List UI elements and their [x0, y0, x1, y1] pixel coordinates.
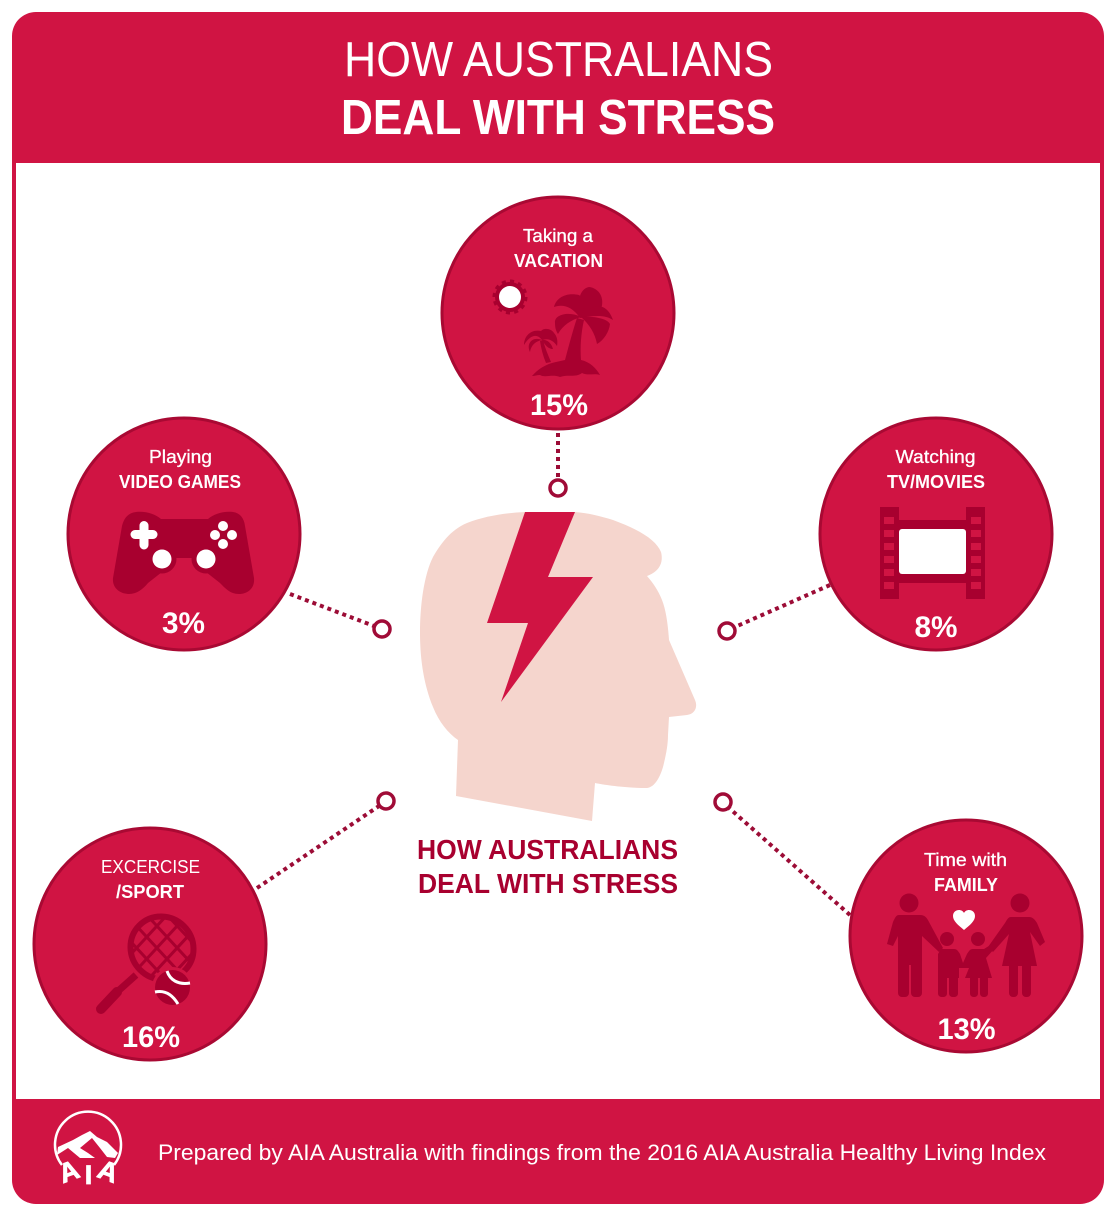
- title: DEAL WITH STRESS: [341, 91, 775, 145]
- footer logo: AIA: A: [94, 1154, 122, 1189]
- connector: video games: [290, 594, 390, 637]
- connector: family: [715, 794, 850, 915]
- panel: exercise: 16%: [122, 1021, 180, 1054]
- connector: tv and movies: [719, 585, 830, 639]
- panel: tv and movies: Watching: [896, 447, 976, 467]
- panel: exercise: /SPORT: [116, 882, 184, 902]
- centre caption: DEAL WITH STRESS: [418, 868, 678, 899]
- icon: sun: [494, 282, 526, 312]
- title: [341, 33, 775, 145]
- panel: video games: VIDEO GAMES: [119, 472, 241, 492]
- panel: vacation: [442, 197, 674, 429]
- icon: film strip: [880, 507, 985, 599]
- panel: tv and movies: 8%: [914, 611, 958, 644]
- panel: video games: Playing: [149, 447, 212, 467]
- icon: tennis racket and ball: [96, 914, 196, 1014]
- panel: exercise: [34, 828, 266, 1060]
- connector: vacation: [550, 433, 566, 496]
- footer note: Prepared by AIA Australia with findings from the 2016 AIA Australia Healthy Living Index: [158, 1140, 1046, 1165]
- footer logo: AIA: A: [55, 1154, 83, 1189]
- panel: family: 13%: [938, 1013, 996, 1046]
- panel: vacation: VACATION: [514, 251, 603, 271]
- panel: family: FAMILY: [934, 875, 998, 895]
- panel: family: [850, 820, 1082, 1052]
- panel: vacation: Taking a: [523, 226, 594, 246]
- connector: exercise: [257, 793, 394, 888]
- head with lightning bolt: [420, 512, 696, 821]
- footer logo: AIA: [55, 1112, 122, 1190]
- panel: exercise: EXCERCISE: [101, 857, 200, 877]
- centre caption: [417, 834, 678, 899]
- footer logo: AIA: I: [85, 1160, 92, 1190]
- panel: tv and movies: [820, 418, 1052, 650]
- icon: game controller: [113, 512, 254, 594]
- centre caption: HOW AUSTRALIANS: [417, 834, 678, 865]
- icon: palm island: [524, 287, 613, 377]
- panel: video games: [68, 418, 300, 650]
- panel: tv and movies: TV/MOVIES: [887, 472, 985, 492]
- panel: video games: 3%: [162, 607, 205, 640]
- title: HOW AUSTRALIANS: [344, 33, 773, 87]
- panel: vacation: 15%: [530, 389, 588, 422]
- panel: family: Time with: [924, 850, 1007, 870]
- icon: family holding hands: [887, 894, 1045, 997]
